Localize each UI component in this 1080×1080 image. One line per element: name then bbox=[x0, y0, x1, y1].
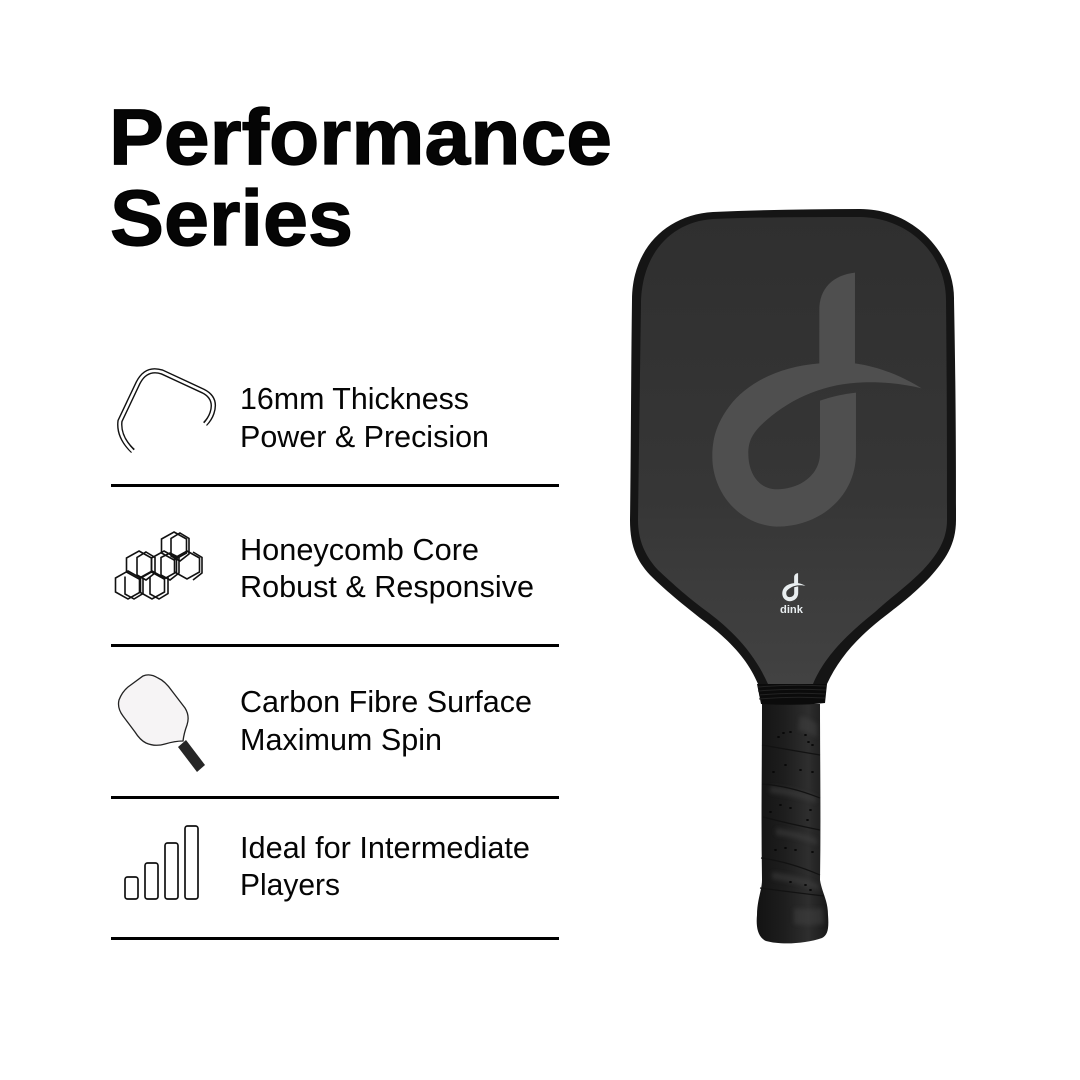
icon: ascending bars bbox=[125, 826, 198, 899]
text: 16mm Thickness bbox=[240, 381, 489, 454]
paddle photo bbox=[630, 209, 956, 943]
small dink logo bbox=[780, 573, 805, 616]
text: Carbon Fibre Surface: Carbon Fibre Surface bbox=[240, 684, 532, 719]
paddle grip bbox=[757, 704, 828, 943]
feature row: thickness bbox=[120, 371, 489, 454]
icon: honeycomb bbox=[116, 532, 202, 599]
text: 16mm Thickness: 16mm Thickness bbox=[240, 381, 469, 416]
text: Ideal for Intermediate: Players bbox=[240, 867, 340, 902]
text: Honeycomb Core bbox=[240, 532, 534, 604]
text: Honeycomb Core: Honeycomb Core bbox=[240, 532, 479, 567]
paddle collar bbox=[757, 684, 827, 705]
text: 16mm Thickness: Power & Precision bbox=[240, 419, 489, 454]
feature row: level bbox=[125, 826, 530, 902]
icon: small paddle bbox=[118, 675, 205, 772]
title bbox=[109, 92, 612, 262]
text: Honeycomb Core: Robust & Responsive bbox=[240, 569, 534, 604]
text: Carbon Fibre Surface bbox=[240, 684, 532, 757]
text: Ideal for Intermediate bbox=[240, 830, 530, 902]
small dink logo: dink bbox=[780, 604, 804, 616]
title: Series bbox=[110, 173, 353, 262]
feature row: carbon fibre bbox=[118, 675, 532, 772]
icon: paddle edge thickness bbox=[120, 371, 213, 452]
text: Ideal for Intermediate: Ideal for Intermediate bbox=[240, 830, 530, 865]
paddle rim bbox=[630, 209, 956, 684]
title: Performance bbox=[109, 92, 612, 181]
text: Carbon Fibre Surface: Maximum Spin bbox=[240, 722, 442, 757]
large logo mark bbox=[712, 273, 922, 527]
feature row: honeycomb bbox=[116, 532, 534, 604]
paddle face bbox=[638, 217, 947, 684]
